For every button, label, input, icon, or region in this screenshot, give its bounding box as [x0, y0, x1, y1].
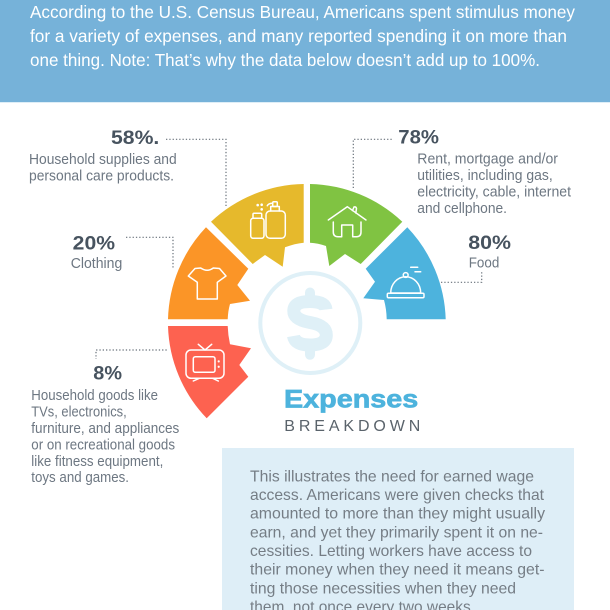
callout: 80% food [441, 232, 511, 282]
callout: 80% food: 80% [468, 232, 511, 254]
callout: 8% household goods [31, 350, 179, 486]
callout: 58% household supplies [29, 127, 226, 208]
panel: earned wage access note: their money when they need it means get- [250, 562, 544, 579]
callout: 78% rent and utilities: 78% [398, 126, 439, 148]
header banner: According to the U.S. Census Bureau, Americans spent stimulus money [30, 2, 575, 22]
callout: 8% household goods: toys and games. [31, 470, 129, 486]
icon: t-shirt [188, 268, 226, 299]
callout: 20% clothing: Clothing [71, 256, 122, 272]
icon: bottles [251, 202, 285, 238]
heading: Breakdown: BREAKDOWN [284, 418, 420, 435]
panel: earned wage access note [222, 448, 574, 610]
callout: 8% household goods: Household goods like [31, 388, 158, 404]
callout: 8% household goods: 8% [93, 362, 122, 384]
callout: 20% clothing [71, 232, 173, 272]
callout: 78% rent and utilities: and cellphone. [417, 201, 507, 217]
callout: 20% clothing: 20% [73, 232, 115, 254]
panel: earned wage access note: access. Americans were given checks that [250, 487, 545, 504]
panel: earned wage access note: cessities. Letting workers have access to [250, 543, 532, 560]
callout: 58% household supplies: Household supplies and [29, 152, 177, 168]
icon: dollar coin [260, 273, 360, 373]
callout: 8% household goods: furniture, and appliances [31, 421, 179, 437]
callout: 80% food: Food [469, 255, 499, 271]
panel: earned wage access note: ting those necessities when they need [250, 580, 516, 597]
segment: rent and utilities (green) [310, 184, 402, 266]
icon: television [186, 344, 224, 381]
callout: 78% rent and utilities: Rent, mortgage and/or [417, 151, 558, 167]
callout: 8% household goods: TVs, electronics, [31, 404, 127, 420]
icon: food cloche [387, 267, 424, 298]
heading: Expenses: Expenses [284, 386, 418, 414]
callout: 78% rent and utilities: electricity, cable, internet [417, 184, 571, 200]
header banner: for a variety of expenses, and many reported spending it on more than [30, 26, 567, 46]
segment: clothing (orange) [168, 227, 250, 319]
callout: 78% rent and utilities [353, 126, 571, 217]
segment: household supplies (yellow) [211, 184, 304, 267]
callout: 58% household supplies: 58%. [111, 127, 159, 149]
callout: 8% household goods: like fitness equipment, [31, 454, 163, 470]
panel: earned wage access note: earn, and yet they primarily spent it on ne- [250, 524, 543, 541]
callout: 8% household goods: or on recreational goods [31, 438, 175, 454]
callout: 58% household supplies: personal care products. [29, 169, 174, 185]
header banner: one thing. Note: That’s why the data below doesn’t add up to 100%. [30, 50, 540, 70]
panel: earned wage access note: amounted to more than they might usually [250, 506, 545, 523]
segment: household goods (red) [168, 326, 251, 418]
icon: house [328, 207, 366, 237]
callout: 78% rent and utilities: utilities, including gas, [417, 168, 553, 184]
panel: earned wage access note: This illustrates the need for earned wage [250, 468, 534, 485]
header banner [0, 0, 610, 103]
segment: food (blue) [363, 227, 446, 319]
